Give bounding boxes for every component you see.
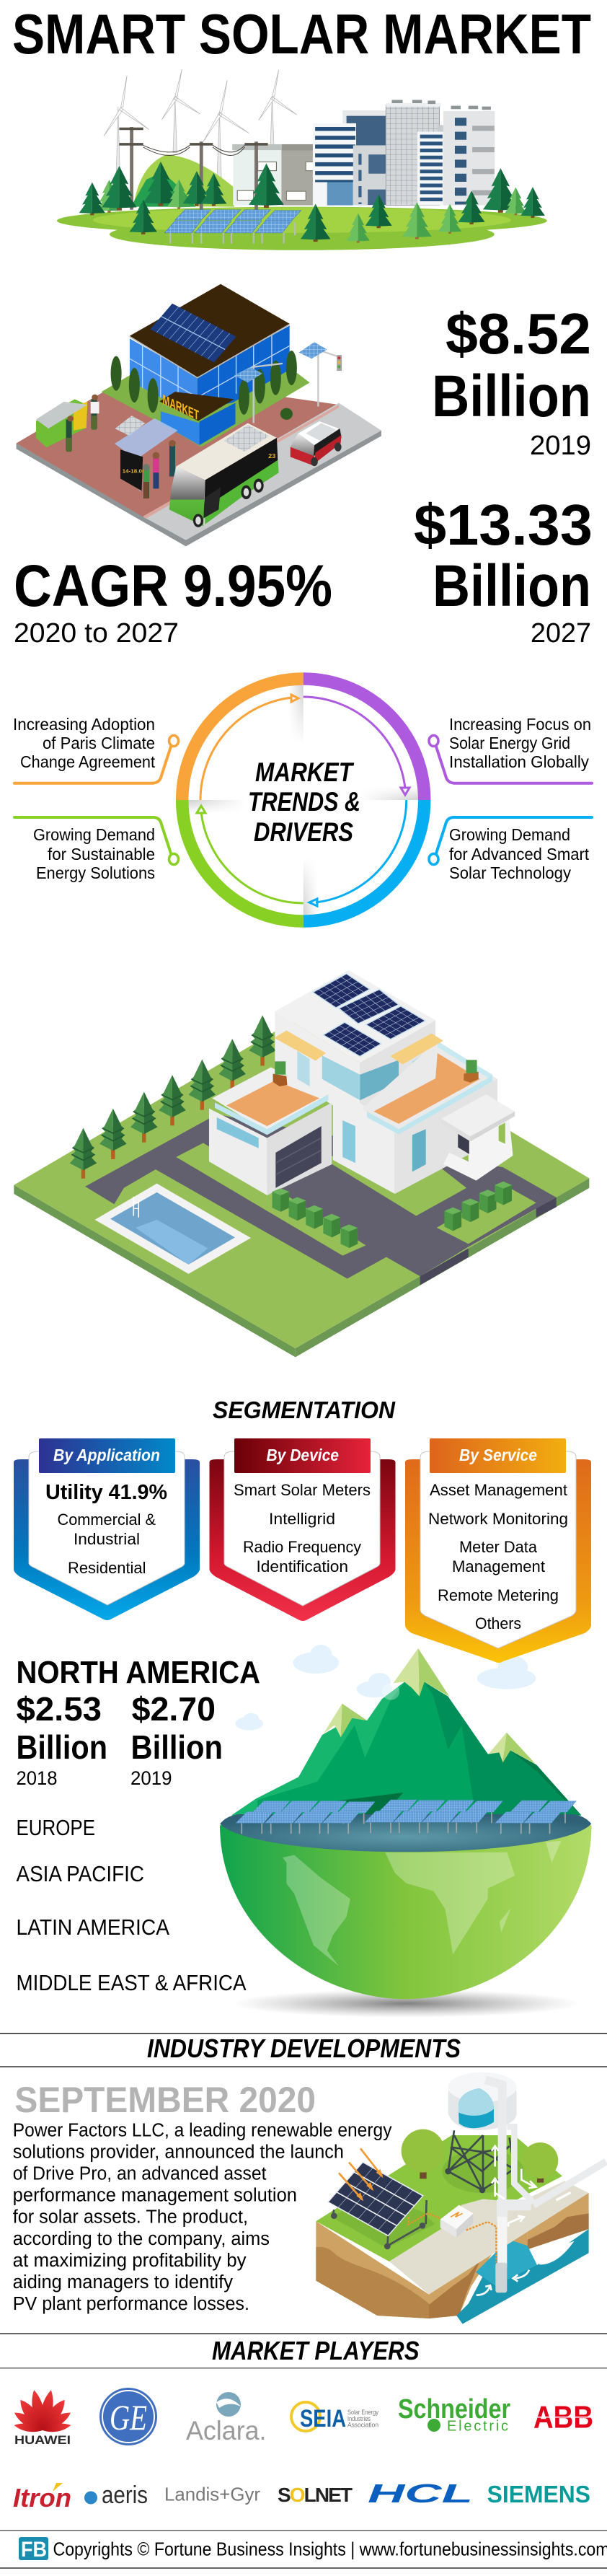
illustration: isometric market building with bus and street xyxy=(17,284,381,546)
soil block xyxy=(316,2193,589,2318)
market sign: MARKET xyxy=(163,392,199,424)
mountains xyxy=(231,1648,581,1816)
text block: industry development: aiding managers to identify xyxy=(13,2272,233,2293)
panel: by device: Identification xyxy=(257,1557,348,1575)
logo: Itron: Itron xyxy=(13,2483,71,2513)
panel: by service: Remote Metering xyxy=(438,1586,559,1604)
stat: CAGR: CAGR 9.95% xyxy=(14,553,332,619)
ground surface xyxy=(316,2135,589,2295)
callout: Paris climate agreement: of Paris Climate xyxy=(43,734,155,752)
pool xyxy=(95,1184,251,1274)
illustration: solar powered water pump xyxy=(316,2072,606,2324)
panel: by application: Residential xyxy=(68,1559,146,1577)
text block: industry development: performance management solution xyxy=(13,2185,297,2205)
logo: HCL: HCL xyxy=(368,2479,473,2508)
callout: solar energy grid: Installation Globally xyxy=(449,752,589,771)
stat: CAGR: 2020 to 2027 xyxy=(14,618,179,649)
header xyxy=(430,1438,566,1473)
region: North America stats: Billion xyxy=(131,1728,223,1766)
clouds xyxy=(235,1645,536,1731)
inverter xyxy=(409,2205,496,2263)
stat: 2019 value xyxy=(432,302,591,461)
heading: market players: MARKET PLAYERS xyxy=(212,2336,420,2365)
illustration: isometric house with rooftop solar xyxy=(14,970,589,1357)
callout: advanced smart solar technology: Solar Technology xyxy=(449,863,571,882)
region list: EUROPE xyxy=(16,1815,95,1840)
callout: Paris climate agreement: Change Agreement xyxy=(20,752,156,771)
stat: CAGR xyxy=(14,553,332,649)
chart: market trends and drivers ring xyxy=(182,679,425,921)
stat: 2027 value xyxy=(414,493,593,649)
water tower xyxy=(445,2072,517,2193)
panel: by device xyxy=(209,1438,395,1621)
logo: Huawei xyxy=(12,2389,73,2447)
logo: Schneider Electric: Electric xyxy=(447,2418,508,2434)
text block: industry development: for solar assets. The product, xyxy=(13,2207,248,2227)
region: North America stats: $2.70 xyxy=(132,1690,216,1728)
solar arrays on disc xyxy=(220,1800,591,1852)
logo: aeris: aeris xyxy=(102,2482,148,2509)
callout: solar energy grid: Increasing Focus on xyxy=(449,715,591,734)
text block: industry development: at maximizing profitability by xyxy=(13,2251,247,2271)
callout: solar energy grid: Solar Energy Grid xyxy=(449,734,570,752)
date heading: SEPTEMBER 2020 xyxy=(14,2080,316,2120)
water xyxy=(456,2229,589,2324)
region: North America stats: $2.53 xyxy=(16,1690,102,1728)
panel: by application: Commercial & xyxy=(58,1511,156,1529)
callout: sustainable energy: Growing Demand xyxy=(33,825,155,844)
panel: by device: Intelligrid xyxy=(269,1510,335,1528)
region: North America stats: 2018 xyxy=(16,1767,58,1789)
header xyxy=(234,1438,371,1473)
panel: by service: Network Monitoring xyxy=(428,1510,568,1528)
building xyxy=(209,970,515,1195)
logo: SEIA: Solar Energy xyxy=(347,2409,378,2416)
region: North America stats: Billion xyxy=(16,1728,107,1766)
region: North America stats xyxy=(16,1655,260,1789)
region list: MIDDLE EAST & AFRICA xyxy=(16,1970,247,1995)
callout: advanced smart solar technology: for Advanced Smart xyxy=(449,845,590,863)
header: By Device xyxy=(267,1446,339,1464)
callout: solar energy grid xyxy=(429,715,592,783)
header xyxy=(39,1438,175,1473)
panel: by device: Radio Frequency xyxy=(243,1538,361,1556)
pump xyxy=(495,2263,507,2293)
text block: industry development: PV plant performance losses. xyxy=(13,2294,249,2314)
logo: Landis+Gyr: Landis+Gyr xyxy=(164,2483,260,2505)
illustration: half globe with mountains and solar array xyxy=(220,1645,592,2018)
region: North America stats: NORTH AMERICA xyxy=(16,1655,260,1690)
callout: advanced smart solar technology xyxy=(429,817,592,882)
text block: industry development: of Drive Pro, an advanced asset xyxy=(13,2163,266,2184)
text block: industry development: solutions provider, announced the launch xyxy=(13,2142,344,2162)
panel: by service: Asset Management xyxy=(430,1481,567,1499)
center label: TRENDS & xyxy=(248,787,360,817)
illustration: isometric market building with bus and street: 14-18.00 xyxy=(123,468,146,474)
region list xyxy=(16,1815,247,1995)
heading: industry developments: INDUSTRY DEVELOPMENTS xyxy=(147,2034,461,2063)
logo: Schneider Electric: Schneider xyxy=(398,2394,510,2425)
panel: by application: Industrial xyxy=(74,1530,140,1548)
footer logo: FB xyxy=(21,2538,47,2562)
panel: by service: Management xyxy=(452,1557,545,1575)
text block: industry development xyxy=(13,2120,392,2314)
panel: by service: Others xyxy=(475,1614,521,1632)
header: By Application xyxy=(53,1446,160,1464)
center label: MARKET xyxy=(255,757,355,787)
logo: aeris xyxy=(84,2482,148,2509)
callout: Paris climate agreement xyxy=(13,715,179,783)
logo: GE xyxy=(99,2388,157,2445)
panel: by device: Smart Solar Meters xyxy=(234,1481,371,1499)
logo: GE: GE xyxy=(110,2397,147,2437)
pipes xyxy=(485,2080,606,2267)
logo: ABB: ABB xyxy=(533,2399,593,2435)
text block: industry development: Power Factors LLC, a leading renewable energy xyxy=(13,2120,392,2140)
stat: 2019 value: $8.52 xyxy=(446,302,591,366)
stat: 2027 value: $13.33 xyxy=(414,493,593,557)
tree row xyxy=(70,1015,276,1179)
flow arrows xyxy=(477,2146,536,2295)
region list: LATIN AMERICA xyxy=(16,1915,169,1940)
center label xyxy=(248,757,360,847)
panel: by application xyxy=(14,1438,200,1620)
solar panel with sun rays xyxy=(328,2148,427,2249)
callout: Paris climate agreement: Increasing Adoption xyxy=(13,715,155,734)
panel: by service: Meter Data xyxy=(459,1538,538,1556)
panel: by application: Utility 41.9% xyxy=(45,1481,167,1504)
header: By Service xyxy=(459,1446,537,1464)
logo: Huawei: HUAWEI xyxy=(14,2433,71,2447)
stat: 2027 value: 2027 xyxy=(531,618,591,649)
logo: Aclara: Aclara. xyxy=(186,2416,267,2445)
panel: by service xyxy=(405,1438,591,1663)
logo: Siemens: SIEMENS xyxy=(487,2481,590,2507)
heading: segmentation: SEGMENTATION xyxy=(213,1397,396,1423)
region list: ASIA PACIFIC xyxy=(16,1861,144,1886)
center label: DRIVERS xyxy=(254,817,353,847)
logo: SEIA: Industries xyxy=(347,2415,371,2422)
stat: 2019 value: 2019 xyxy=(530,431,591,461)
globe xyxy=(220,1825,592,2018)
region: North America stats: 2019 xyxy=(130,1767,172,1789)
rooftop solar panels xyxy=(313,974,425,1057)
callout: sustainable energy: for Sustainable xyxy=(48,845,155,863)
callout: sustainable energy xyxy=(14,817,179,882)
callout: sustainable energy: Energy Solutions xyxy=(36,863,155,882)
logo: SEIA: Association xyxy=(347,2421,378,2428)
text block: industry development: according to the company, aims xyxy=(13,2229,270,2249)
illustration: isometric market building with bus and street: 23 xyxy=(268,452,275,460)
logo: SEIA xyxy=(291,2402,378,2432)
trees xyxy=(402,2129,558,2183)
callout: advanced smart solar technology: Growing Demand xyxy=(449,825,570,844)
illustration: green energy city with wind turbines and solar farm xyxy=(57,69,547,250)
logo: Aclara xyxy=(186,2392,267,2445)
logo: Solnet: SOLNET xyxy=(278,2484,353,2506)
shrubs xyxy=(273,1182,512,1248)
logo: Schneider Electric xyxy=(398,2394,510,2434)
logo: SEIA: SEIA xyxy=(300,2405,346,2432)
